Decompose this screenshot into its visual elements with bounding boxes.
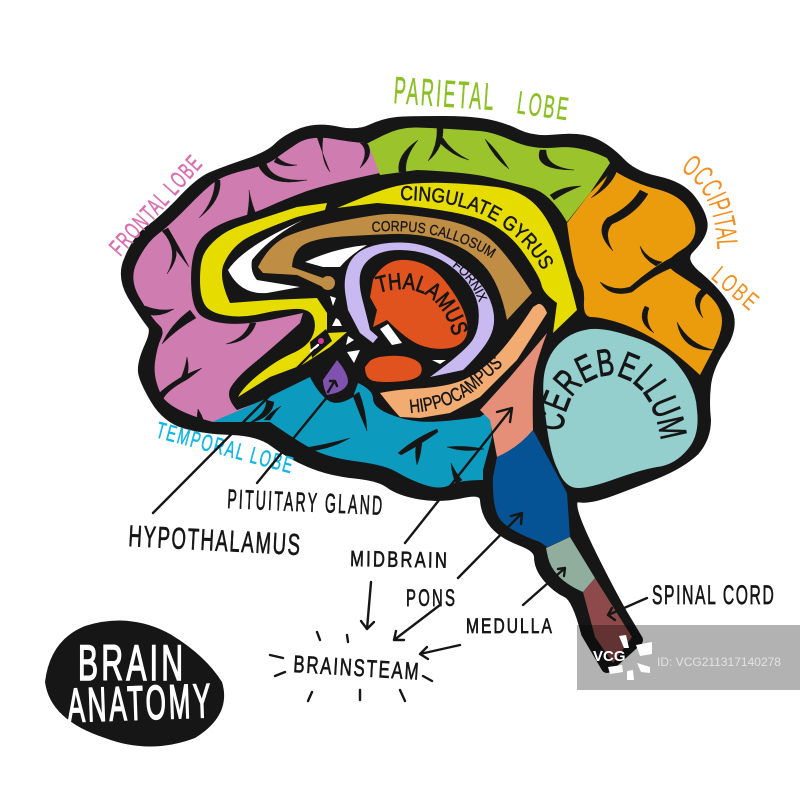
label: corpus callosum: CORPUS CALLOSUM [372,220,496,258]
region: occipital lobe [567,170,722,375]
label: temporal lobe: TEMPORAL LOBE [153,418,295,479]
label: midbrain: MIDBRAIN [350,547,447,573]
region: midbrain [480,333,547,457]
label: fornix: FORNIX [452,262,488,302]
brainstem burst marks [270,632,432,701]
label: medulla: MEDULLA [466,614,552,638]
region: cerebellum [543,329,698,488]
badge: brain anatomy [45,621,224,746]
watermark: ID: VCG211317140278 [657,655,781,669]
region: cingulate gyrus front [200,203,347,397]
label: frontal lobe: FRONTAL LOBE [105,151,208,261]
white crescent [305,245,367,267]
arrow: midbrain [405,408,512,543]
label: occipital lobe [684,156,764,316]
region: frontal lobe [133,138,380,422]
brain silhouette [127,122,729,667]
arrow: midbrain to brainstem [361,582,374,629]
white ventricle [228,220,303,293]
label: parietal lobe: PARIETAL [392,70,495,119]
label: brainstem: BRAINSTEAM [293,651,419,685]
label: thalamus: THALAMUS [374,272,468,335]
region: corpus callosum [258,214,532,320]
region: parietal lobe [368,127,610,222]
label: cingulate gyrus: CINGULATE GYRUS [400,186,553,269]
region: hypothalamus nucleus [365,356,422,382]
region: medulla [546,537,595,592]
label: spinal cord: SPINAL CORD [652,580,774,610]
region: cingulate gyrus [337,183,577,333]
arrow: pituitary gland [257,396,328,483]
region: fornix [345,242,494,377]
region: hippocampus [380,304,547,418]
region: spinal cord [583,578,632,663]
label: pituitary gland: PITUITARY GLAND [227,484,383,521]
arrow: pons to brainstem [394,605,440,640]
label: hippocampus: HIPPOCAMPUS [410,357,502,414]
label: pons: PONS [406,586,455,612]
region: pons [493,430,570,547]
arrow: medulla [523,568,565,605]
arrow: pons [458,513,522,578]
label: occipital lobe: OCCIPITAL [684,156,738,250]
watermark: VCG [593,648,626,665]
arrow: spinal cord [608,598,647,620]
region: temporal lobe [212,377,492,488]
label: occipital lobe: LOBE [706,261,764,316]
label: parietal lobe: LOBE [515,86,570,128]
white gaps [330,296,446,364]
badge: brain anatomy: BRAIN [78,635,183,691]
label: hypothalamus: HYPOTHALAMUS [128,520,301,562]
badge: brain anatomy: ANATOMY [67,675,211,733]
label: cerebellum: CEREBELLUM [544,349,687,440]
sulci: brain folds [145,127,714,484]
arrow: medulla to brainstem [420,645,460,659]
hypothalamus detail [310,329,332,358]
region: pituitary gland [323,360,348,395]
arrow: hypothalamus [153,350,315,513]
watermark [577,625,800,690]
label: parietal lobe [392,70,570,128]
region: thalamus [370,260,468,349]
